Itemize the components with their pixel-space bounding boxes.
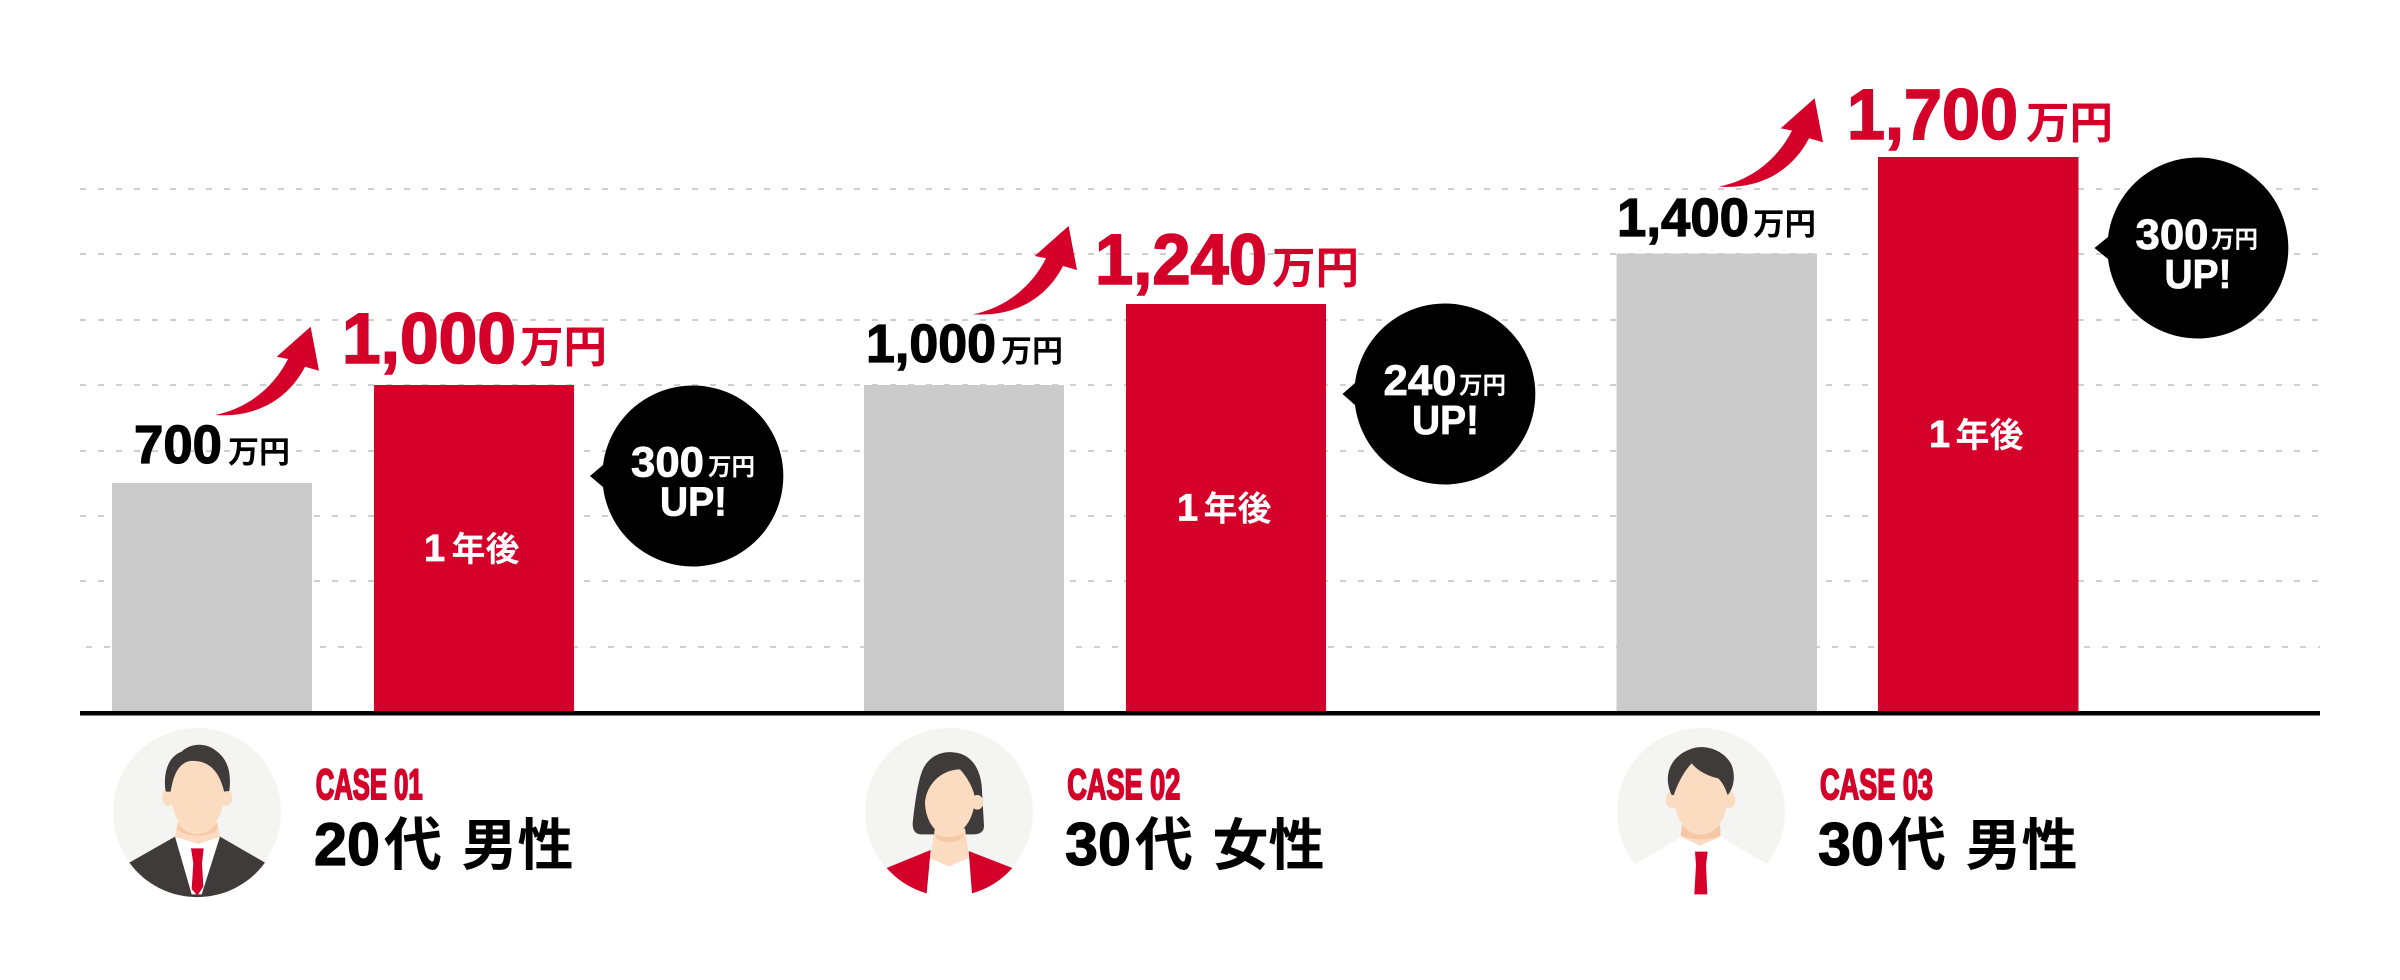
label: 1,400万円: 1,400 (1617, 188, 1749, 248)
text: 30代 女性: 代 (1135, 813, 1193, 878)
label: 1,000万円 (342, 300, 607, 379)
text: 20代 男性: 代 (384, 813, 442, 878)
callout: 300万円 UP! (2094, 158, 2288, 339)
label: 1年後: 1 (424, 528, 445, 570)
label: 1,240万円 (1095, 221, 1359, 300)
label: 1,700万円: 1,700 (1847, 76, 2018, 155)
chart baseline axis (80, 711, 2320, 716)
text: 30代 男性: 男性 (1966, 814, 2078, 877)
label: 1,700万円: 万円 (2026, 99, 2113, 148)
callout: 300万円 UP!: UP! (660, 478, 727, 524)
icon: man in white shirt (1617, 728, 1785, 896)
callout: 240万円 UP!: UP! (1412, 397, 1479, 443)
text: 30代 男性 (1818, 811, 2078, 878)
callout: 300万円 UP!: UP! (2164, 251, 2232, 297)
bar: before 1400 (1616, 254, 1817, 712)
label: 700万円: 700 (134, 415, 222, 475)
icon: man in dark suit (113, 728, 281, 897)
text: 20代 男性: 男性 (462, 814, 574, 877)
label: 1年後: 年後 (1204, 490, 1272, 528)
arrow (215, 327, 319, 415)
callout: 300万円 UP!: 万円 (2211, 226, 2258, 254)
bar: before 700 (112, 483, 312, 712)
callout: 240万円 UP! (1342, 303, 1535, 484)
bar: after 1000 (374, 385, 574, 712)
bar: after 1700 (1878, 157, 2078, 712)
callout: 300万円 UP!: 万円 (708, 454, 755, 481)
callout: 300万円 UP! (590, 386, 783, 566)
text: CASE 02: CASE 02 (1067, 761, 1180, 809)
label: 1,000万円: 万円 (520, 323, 607, 372)
label: 1,000万円: 1,000 (342, 300, 516, 379)
label: 1年後: 年後 (452, 531, 520, 569)
text: 20代 男性 (314, 811, 574, 878)
label: 1,000万円 (866, 314, 1063, 374)
label: 1,240万円: 万円 (1272, 244, 1359, 293)
arrow (973, 226, 1077, 315)
arrow (1719, 98, 1823, 187)
label: 700万円: 万円 (228, 435, 290, 470)
label: 1年後: 1 (1177, 488, 1198, 530)
bar: before 1000 (864, 385, 1064, 712)
callout: 300万円 UP!: 300 (631, 438, 704, 486)
label: 1,400万円 (1617, 188, 1816, 248)
label: 1,700万円 (1847, 76, 2113, 155)
text: 30代 女性: 30 (1065, 811, 1131, 878)
callout: 240万円 UP!: 240 (1384, 357, 1456, 405)
label: 1,000万円: 1,000 (866, 314, 996, 374)
label: 1年後: 1 (1929, 414, 1950, 456)
callout: 240万円 UP!: 万円 (1459, 372, 1506, 400)
label: 1年後 (1177, 488, 1272, 530)
text: 30代 女性 (1065, 811, 1324, 878)
panel: case 02 bars (864, 221, 1535, 712)
text: 30代 男性: 30 (1818, 811, 1884, 878)
text: 30代 男性: 代 (1888, 813, 1946, 878)
label: 700万円 (134, 415, 290, 475)
text: 20代 男性: 20 (314, 811, 380, 878)
label: 1年後 (1929, 414, 2024, 456)
text: CASE 03: CASE 03 (1820, 761, 1933, 809)
panel: case 03 bars (1616, 76, 2288, 712)
callout: 300万円 UP!: 300 (2136, 211, 2208, 259)
label: 1,000万円: 万円 (1001, 334, 1063, 369)
label: 1,400万円: 万円 (1753, 207, 1816, 242)
icon: woman in red jacket (865, 728, 1033, 896)
text: CASE 01: CASE 01 (316, 761, 423, 809)
text: 30代 女性: 女性 (1212, 814, 1324, 877)
label: 1,240万円: 1,240 (1095, 221, 1267, 300)
label: 1年後 (424, 528, 520, 570)
label: 1年後: 年後 (1956, 417, 2024, 455)
panel: case 01 bars (112, 300, 783, 712)
bar: after 1240 (1126, 304, 1326, 712)
